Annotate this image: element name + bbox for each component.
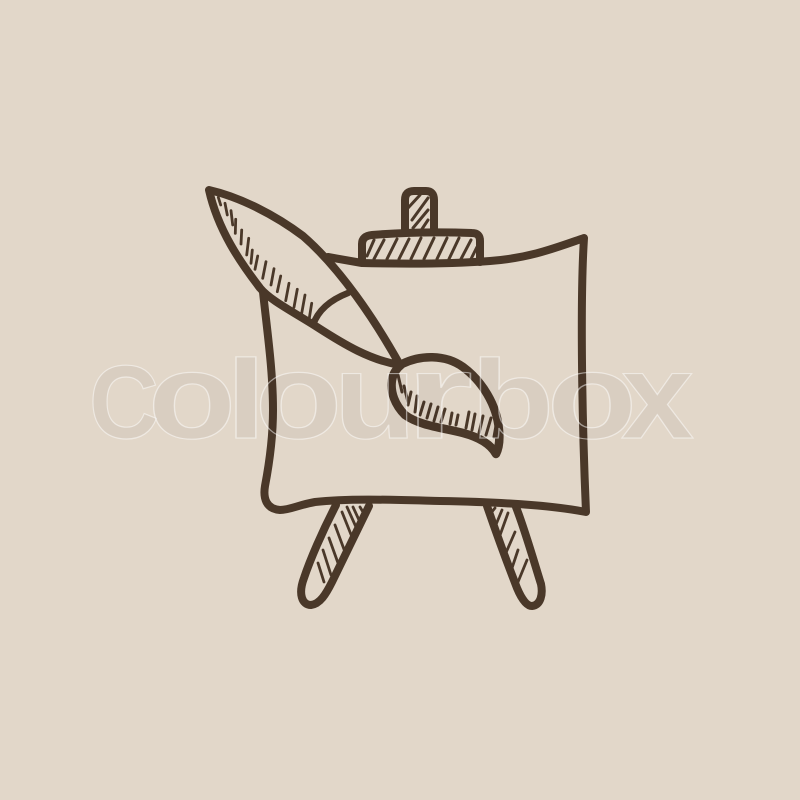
icon: paint brush handle (209, 190, 400, 365)
watermark: Colourbox: r (406, 328, 473, 464)
watermark: Colourbox: o (547, 328, 637, 464)
icon: paint brush bristle blob (392, 357, 499, 454)
icon: easel peg and clamp (362, 191, 480, 262)
watermark: Colourbox: u (334, 328, 416, 464)
watermark: Colourbox (89, 328, 694, 464)
watermark: Colourbox: o (148, 328, 236, 464)
watermark: Colourbox: o (255, 328, 342, 464)
icon: canvas board (263, 238, 586, 512)
icon: easel legs (301, 505, 542, 606)
watermark: Colourbox: C (89, 345, 159, 461)
watermark: Colourbox: x (621, 328, 694, 464)
watermark: Colourbox: b (471, 337, 554, 462)
watermark: Colourbox: l (226, 337, 266, 462)
